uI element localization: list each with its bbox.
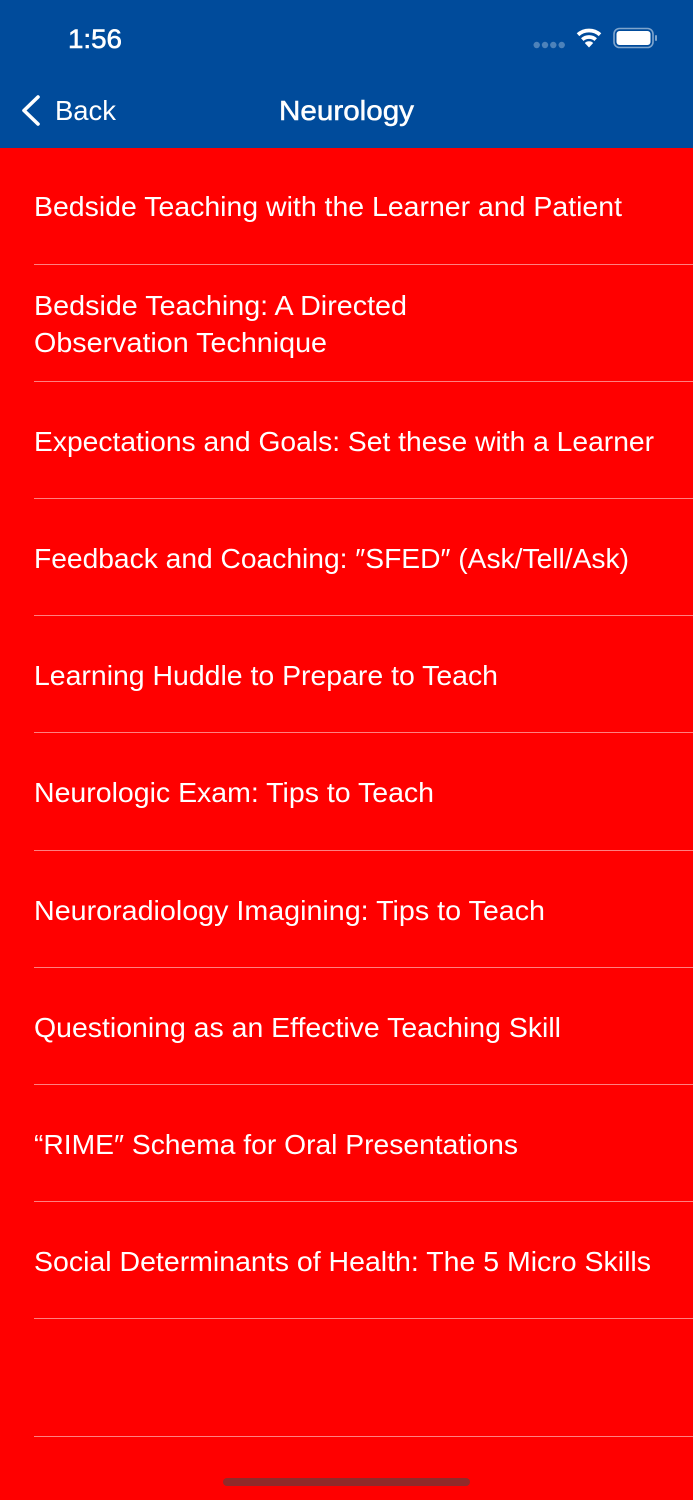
home indicator [223, 1478, 470, 1486]
empty list row separator [34, 1436, 693, 1437]
list row 4: Feedback and Coaching: ″SFED″ (Ask/Tell/Ask) [34, 543, 629, 574]
back label: Back [55, 95, 117, 126]
list row 10: Social Determinants of Health: The 5 Micro Skills [34, 1246, 651, 1277]
screen title: Neurology [279, 95, 414, 126]
list row 5: Learning Huddle to Prepare to Teach [34, 660, 498, 691]
list row 2 [34, 290, 693, 382]
icon: back chevron [24, 97, 38, 124]
icon: wifi [578, 30, 600, 48]
list row 6: Neurologic Exam: Tips to Teach [34, 777, 434, 808]
icon: battery [614, 28, 657, 48]
list row 8: Questioning as an Effective Teaching Skill [34, 1012, 561, 1043]
list row 7: Neuroradiology Imagining: Tips to Teach [34, 895, 545, 926]
icon: cellular signal dots [534, 42, 565, 48]
list row 2: Bedside Teaching: A Directed [34, 290, 407, 321]
list row 1: Bedside Teaching with the Learner and Patient [34, 191, 622, 222]
list row 9: “RIME″ Schema for Oral Presentations [34, 1129, 518, 1160]
header bar [0, 0, 693, 148]
list row 3: Expectations and Goals: Set these with a Learner [34, 426, 654, 457]
status bar time: 1:56 [68, 24, 122, 54]
list row 2: Observation Technique [34, 327, 327, 358]
